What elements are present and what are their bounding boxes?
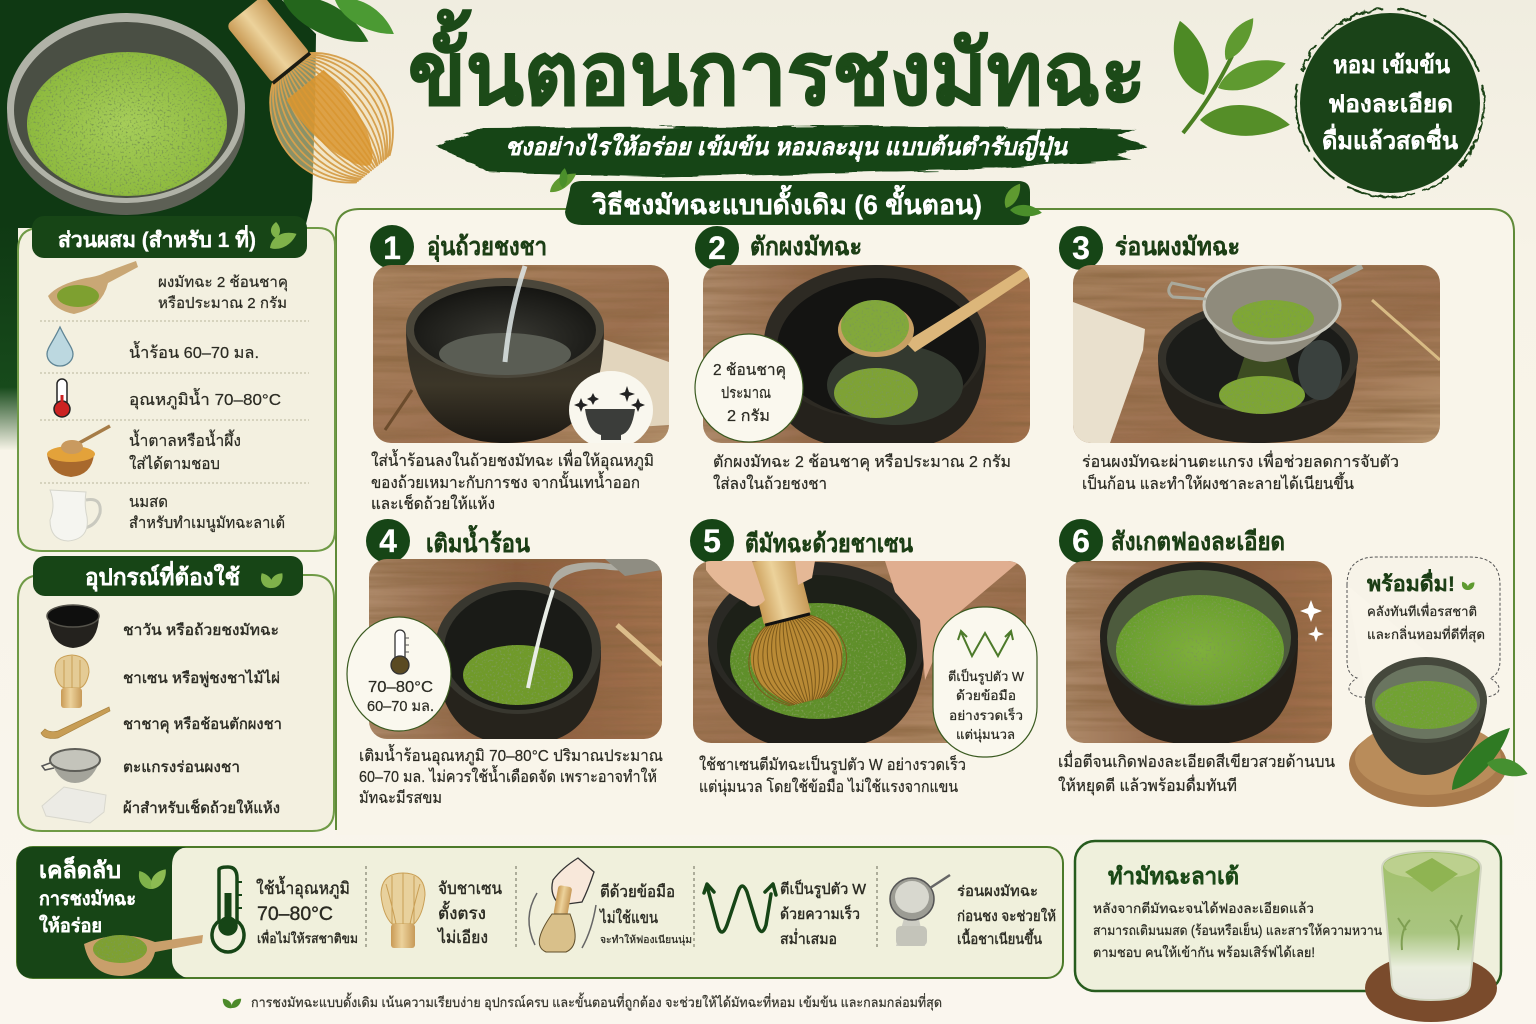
panel: ingredients: น้ำตาลหรือน้ำผึ้ง bbox=[129, 429, 241, 450]
step 4 text: 60–70 มล. ไม่ควรใช้น้ำเดือดจัด เพราะอาจทำให้ bbox=[359, 765, 657, 786]
round badge top right bbox=[1296, 9, 1484, 197]
section heading pill bbox=[546, 168, 1042, 225]
panel: equipment: ตะแกรงร่อนผงชา bbox=[123, 759, 240, 776]
step 2 number: 2 bbox=[708, 230, 726, 266]
icon: hand with whisk bbox=[529, 858, 596, 952]
step 6 text: เมื่อตีจนเกิดฟองละเอียดสีเขียวสวยด้านบน bbox=[1058, 750, 1335, 771]
icon: water drop bbox=[47, 327, 73, 366]
step 2 text: ตักผงมัทฉะ 2 ช้อนชาคุ หรือประมาณ 2 กรัม bbox=[713, 453, 1011, 472]
tip 3 text: ไม่ใช้แขน bbox=[598, 908, 658, 927]
step 4 text: มัทฉะมีรสขม bbox=[359, 789, 442, 807]
step 1 text: ของถ้วยเหมาะกับการชง จากนั้นเทน้ำออก bbox=[371, 471, 640, 492]
panel: ingredients: สำหรับทำเมนูมัทฉะลาเต้ bbox=[129, 515, 285, 533]
step 2 callout: ประมาณ bbox=[721, 385, 771, 402]
step 6 photo bbox=[1066, 561, 1332, 745]
tip 5 text: ก่อนชง จะช่วยให้ bbox=[957, 907, 1056, 925]
subtitle brush banner bbox=[436, 126, 1146, 177]
photo: bamboo whisk top bbox=[201, 0, 417, 204]
step 1 number bbox=[370, 225, 414, 269]
ingredients heading bbox=[32, 216, 307, 258]
step 5 number bbox=[690, 519, 734, 563]
step 1 text bbox=[371, 449, 654, 513]
step 4 text: เติมน้ำร้อนอุณหภูมิ 70–80°C ปริมาณประมาณ bbox=[359, 744, 663, 766]
step 2 number bbox=[695, 226, 739, 270]
latte text: หลังจากตีมัทฉะจนได้ฟองละเอียดแล้ว bbox=[1093, 901, 1314, 916]
latte heading: ทำมัทฉะลาเต้ bbox=[1108, 863, 1239, 889]
icon: W motion arrow bbox=[704, 884, 776, 932]
icon: strainer bbox=[42, 749, 100, 783]
panel: main steps bbox=[336, 209, 1514, 835]
callout: ready to drink: พร้อมดื่ม! bbox=[1367, 568, 1455, 596]
panel: matcha latte bbox=[1075, 841, 1501, 991]
step 1 icon badge bbox=[569, 371, 653, 449]
step 6 title: สังเกตฟองละเอียด bbox=[1111, 528, 1285, 556]
step 2 bbox=[695, 226, 1030, 493]
callout: ready to drink bbox=[1347, 557, 1500, 697]
step 3 bbox=[1059, 226, 1440, 493]
equipment heading: อุปกรณ์ที่ต้องใช้ bbox=[85, 560, 240, 592]
step 4 callout bbox=[347, 617, 451, 731]
round badge top right: หอม เข้มข้น bbox=[1333, 52, 1451, 79]
tip 3 text: จะทำให้ฟองเนียนนุ่ม bbox=[600, 934, 692, 946]
tip 4 text bbox=[780, 879, 867, 948]
step 3 title: ร่อนผงมัทฉะ bbox=[1115, 233, 1240, 261]
subtitle brush banner: ชงอย่างไรให้อร่อย เข้มข้น หอมละมุน แบบต้นตำรับญี่ปุ่น bbox=[505, 129, 1069, 162]
footer note: การชงมัทฉะแบบดั้งเดิม เน้นความเรียบง่าย อุปกรณ์ครบ และขั้นตอนที่ถูกต้อง จะช่วยให้ได้มัทฉะที่หอม เข้มข้น และกลมกล่อมที่สุด bbox=[251, 992, 942, 1011]
step 2 title: ตักผงมัทฉะ bbox=[750, 233, 862, 261]
step 1 photo bbox=[373, 265, 669, 443]
icon: thermometer tip bbox=[212, 867, 244, 952]
step 4 text bbox=[359, 744, 663, 807]
step 5 text: ใช้ชาเซนตีมัทฉะเป็นรูปตัว W อย่างรวดเร็ว bbox=[699, 754, 966, 775]
tips heading block bbox=[17, 847, 186, 978]
panel: ingredients: ใส่ได้ตามชอบ bbox=[129, 455, 220, 473]
icon: scoop with matcha bbox=[84, 935, 203, 976]
step 2 callout: 2 ช้อนชาคุ bbox=[713, 362, 786, 380]
step 6 text: ให้หยุดตี แล้วพร้อมดื่มทันที bbox=[1058, 774, 1237, 796]
latte text bbox=[1093, 901, 1382, 960]
callout: ready to drink: คลังทันทีเพื่อรสชาติ bbox=[1367, 603, 1477, 619]
step 5 text: แต่นุ่มนวล โดยใช้ข้อมือ ไม่ใช้แรงจากแขน bbox=[699, 777, 958, 797]
tips heading block: ให้อร่อย bbox=[39, 914, 102, 937]
icon: milk jug bbox=[50, 490, 100, 541]
step 1 text: และเช็ดถ้วยให้แห้ง bbox=[371, 493, 495, 513]
icon: folded towel bbox=[42, 787, 106, 823]
tip 2 text: ไม่เอียง bbox=[436, 927, 488, 947]
step 6 number bbox=[1059, 519, 1103, 563]
round badge top right: ฟองละเอียด bbox=[1328, 91, 1453, 118]
panel: equipment bbox=[18, 556, 334, 831]
icon: strainer and jar bbox=[890, 875, 950, 946]
step 2 text: ใส่ลงในถ้วยชงชา bbox=[713, 474, 827, 493]
step 5 number: 5 bbox=[703, 523, 721, 559]
step 3 text: ร่อนผงมัทฉะผ่านตะแกรง เพื่อช่วยลดการจับตัว bbox=[1082, 450, 1399, 471]
icon: bamboo whisk bbox=[55, 655, 89, 708]
panel: equipment: ผ้าสำหรับเช็ดถ้วยให้แห้ง bbox=[123, 798, 280, 817]
step 4 photo bbox=[369, 559, 662, 745]
step 4 number: 4 bbox=[379, 523, 397, 559]
step 5 callout: อย่างรวดเร็ว bbox=[949, 706, 1023, 723]
tip 5 text: ร่อนผงมัทฉะ bbox=[957, 884, 1038, 900]
icon: matcha scoop bbox=[48, 261, 138, 314]
photo: finished cup on saucer bbox=[1349, 657, 1530, 807]
photo: matcha bowl top left bbox=[7, 13, 245, 215]
panel: ingredients: อุณหภูมิน้ำ 70–80°C bbox=[129, 388, 281, 410]
tip 1 text: ใช้น้ำอุณหภูมิ bbox=[256, 876, 350, 899]
tip 2 text bbox=[436, 879, 502, 947]
tip 5 text bbox=[957, 884, 1056, 948]
tips heading block: การชงมัทฉะ bbox=[39, 889, 136, 910]
icon: black bowl bbox=[47, 605, 99, 648]
latte text: ตามชอบ คนให้เข้ากัน พร้อมเสิร์ฟได้เลย! bbox=[1093, 944, 1315, 960]
tip 5 text: เนื้อชาเนียนขึ้น bbox=[957, 928, 1042, 948]
top-left dark green backdrop bbox=[0, 0, 316, 450]
step 4 number bbox=[366, 519, 410, 563]
latte text: สามารถเติมนมสด (ร้อนหรือเย็น) และสารให้ความหวาน bbox=[1093, 921, 1382, 938]
panel: equipment: ชาชาคุ หรือช้อนตักผงชา bbox=[123, 716, 282, 734]
step 3 number: 3 bbox=[1072, 230, 1090, 266]
step 5 bbox=[690, 519, 1037, 797]
tip 1 text: 70–80°C bbox=[257, 904, 333, 925]
step 3 photo bbox=[1073, 265, 1440, 443]
step 2 callout: 2 กรัม bbox=[727, 408, 770, 425]
step 5 callout: ด้วยข้อมือ bbox=[956, 688, 1016, 703]
tip 3 text bbox=[598, 883, 692, 946]
step 5 title: ตีมัทฉะด้วยชาเซน bbox=[745, 530, 913, 558]
decorative leaf sprig bbox=[1164, 13, 1291, 138]
step 6 number: 6 bbox=[1072, 523, 1090, 559]
panel: ingredients: ผงมัทฉะ 2 ช้อนชาคุ bbox=[158, 274, 288, 292]
step 5 callout: ตีเป็นรูปตัว W bbox=[948, 667, 1025, 685]
tip 2 text: ตั้งตรง bbox=[438, 901, 486, 923]
step 5 callout bbox=[933, 607, 1037, 757]
step 3 text bbox=[1082, 450, 1399, 493]
step 2 photo bbox=[703, 265, 1030, 450]
step 5 photo bbox=[693, 561, 1026, 743]
step 4 bbox=[347, 519, 663, 807]
panel: equipment: ชาเซน หรือพู่ชงชาไม้ไผ่ bbox=[123, 669, 280, 687]
tips heading block: เคล็ดลับ bbox=[39, 855, 121, 883]
step 3 number bbox=[1059, 226, 1103, 270]
step 1 number: 1 bbox=[383, 230, 401, 266]
icon: thermometer bbox=[54, 379, 70, 417]
step 3 text: เป็นก้อน และทำให้ผงชาละลายได้เนียนขึ้น bbox=[1082, 472, 1354, 493]
panel: ingredients bbox=[18, 216, 335, 551]
tip 3 text: ตีด้วยข้อมือ bbox=[600, 883, 675, 901]
step 2 text bbox=[713, 453, 1011, 493]
step 5 callout: แต่นุ่มนวล bbox=[956, 727, 1015, 743]
panel: ingredients: นมสด bbox=[129, 494, 168, 511]
panel: equipment: ชาวัน หรือถ้วยชงมัทฉะ bbox=[123, 622, 279, 639]
title: ขั้นตอนการชงมัทฉะ bbox=[408, 9, 1146, 123]
step 1 text: ใส่น้ำร้อนลงในถ้วยชงมัทฉะ เพื่อให้อุณหภูมิ bbox=[371, 449, 654, 471]
step 2 callout bbox=[695, 334, 803, 442]
panel: ingredients: หรือประมาณ 2 กรัม bbox=[158, 295, 287, 312]
round badge top right: ดื่มแล้วสดชื่น bbox=[1322, 123, 1459, 155]
panel: ingredients: น้ำร้อน 60–70 มล. bbox=[129, 341, 259, 362]
tip 2 text: จับชาเซน bbox=[438, 879, 502, 898]
step 5 text bbox=[699, 754, 966, 797]
step 4 callout: 60–70 มล. bbox=[367, 699, 434, 715]
photo: iced latte on coaster bbox=[1365, 851, 1497, 1022]
tip 1 text bbox=[256, 876, 358, 946]
icon: whisk tip bbox=[381, 873, 425, 948]
step 1 bbox=[370, 225, 669, 513]
step 1 title: อุ่นถ้วยชงชา bbox=[427, 233, 547, 263]
tip 4 text: สม่ำเสมอ bbox=[780, 928, 837, 948]
step 4 callout: 70–80°C bbox=[368, 679, 433, 696]
callout: ready to drink: และกลิ่นหอมที่ดีที่สุด bbox=[1367, 626, 1485, 643]
tip 1 text: เพื่อไม่ให้รสชาติขม bbox=[257, 930, 358, 946]
step 6 bbox=[1058, 519, 1335, 796]
photo: top leaves behind whisk bbox=[277, 0, 400, 54]
icon: honey bowl bbox=[47, 426, 110, 477]
equipment heading bbox=[33, 556, 303, 596]
icon: bamboo scoop bbox=[41, 707, 110, 738]
ingredients heading: ส่วนผสม (สำหรับ 1 ที่) bbox=[58, 224, 256, 252]
section heading pill: วิธีชงมัทฉะแบบดั้งเดิม (6 ขั้นตอน) bbox=[591, 184, 982, 220]
step 6 text bbox=[1058, 750, 1335, 796]
tip 4 text: ตีเป็นรูปตัว W bbox=[780, 879, 867, 898]
panel: tips bbox=[17, 847, 1063, 978]
tip 4 text: ด้วยความเร็ว bbox=[780, 904, 860, 923]
step 4 title: เติมน้ำร้อน bbox=[426, 524, 530, 558]
